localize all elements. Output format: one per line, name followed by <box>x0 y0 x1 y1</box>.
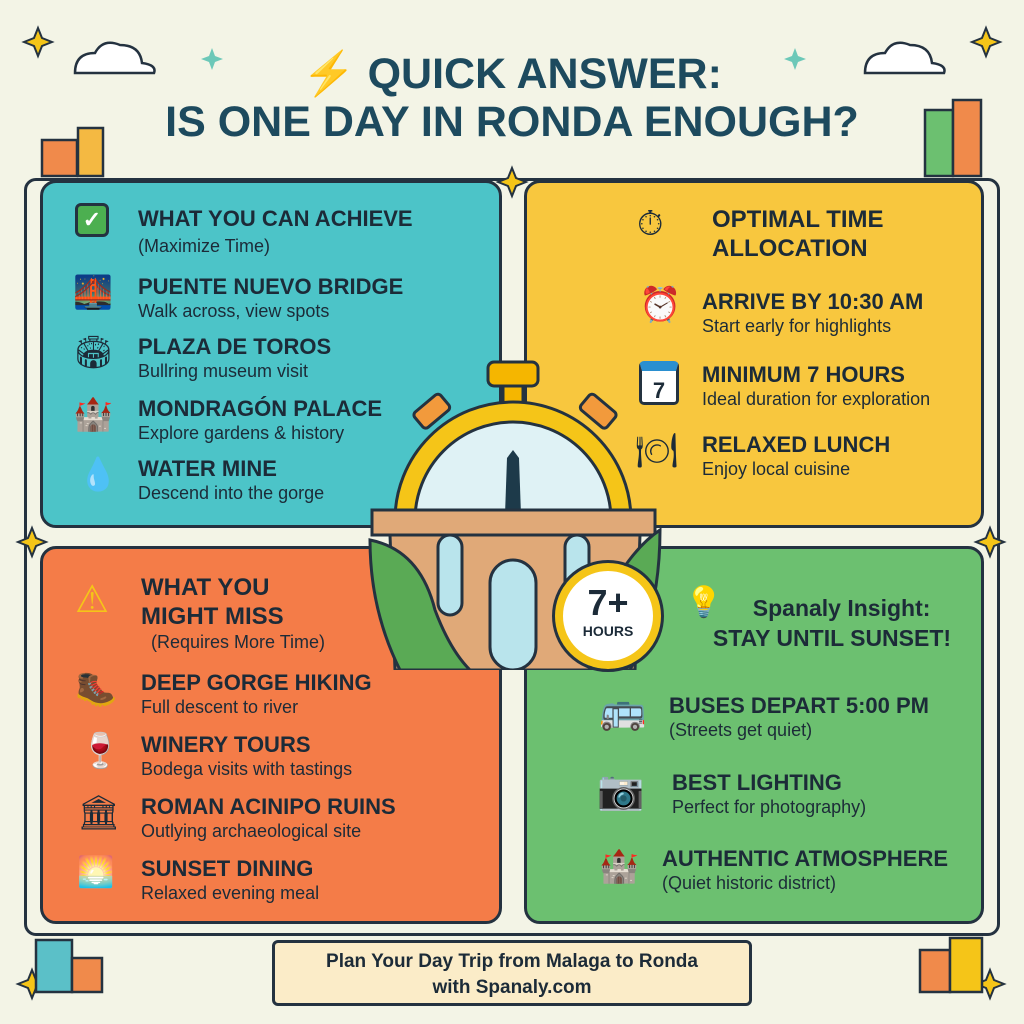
item: palace: 🏰 <box>73 396 113 432</box>
title: ⚡ QUICK ANSWER: <box>302 50 722 98</box>
panel: what you might miss: Bodega visits with tastings <box>141 759 352 779</box>
panel: what you might miss: Relaxed evening meal <box>141 883 319 903</box>
panel: optimal time allocation: MINIMUM 7 HOURS <box>702 362 905 387</box>
item: arrive: ⏰ <box>639 286 681 324</box>
heading: ⚠ <box>75 579 109 621</box>
panel: optimal time allocation <box>524 180 984 528</box>
panel: what you can achieve: Walk across, view spots <box>138 301 329 321</box>
item: water mine: 💧 <box>78 456 118 492</box>
panel: what you can achieve: MONDRAGÓN PALACE <box>138 396 382 421</box>
panel: what you can achieve: Descend into the gorge <box>138 483 324 503</box>
panel: what you can achieve: WATER MINE <box>138 456 277 481</box>
item: puente nuevo: 🌉 <box>73 274 113 310</box>
item: lighting: 📷 <box>597 770 644 812</box>
panel: optimal time allocation: OPTIMAL TIME <box>712 206 884 233</box>
panel: spanaly insight: (Quiet historic district) <box>662 873 836 893</box>
title <box>165 49 859 146</box>
item: minimum 7 hours: 7 <box>653 378 665 403</box>
title: IS ONE DAY IN RONDA ENOUGH? <box>165 98 859 146</box>
item: hiking: 🥾 <box>75 670 117 708</box>
panel: optimal time allocation: Enjoy local cuisine <box>702 459 850 479</box>
heading: 💡 <box>685 586 722 619</box>
item: sunset dining: 🌅 <box>77 856 114 889</box>
item: atmosphere: 🏰 <box>599 848 639 884</box>
panel: spanaly insight: BUSES DEPART 5:00 PM <box>669 693 929 718</box>
outer frame <box>24 178 1000 936</box>
panel: spanaly insight: Spanaly Insight: <box>753 595 930 621</box>
panel: optimal time allocation: ARRIVE BY 10:30 AM <box>702 289 923 314</box>
item: ruins: 🏛 <box>77 794 120 832</box>
panel: what you might miss: SUNSET DINING <box>141 856 313 881</box>
panel: what you can achieve: WHAT YOU CAN ACHIEVE <box>138 206 413 231</box>
panel: what you can achieve: PUENTE NUEVO BRIDGE <box>138 274 403 299</box>
panel: spanaly insight: STAY UNTIL SUNSET! <box>713 625 951 651</box>
panel: what you might miss: Outlying archaeological site <box>141 821 361 841</box>
panel: spanaly insight: BEST LIGHTING <box>672 770 842 795</box>
panel: what you can achieve: (Maximize Time) <box>138 236 270 256</box>
panel: what you might miss: WHAT YOU <box>141 574 269 601</box>
panel: what you might miss: (Requires More Time) <box>151 632 325 652</box>
panel: what you can achieve: PLAZA DE TOROS <box>138 334 331 359</box>
panel: what you can achieve: Explore gardens & history <box>138 423 344 443</box>
footer banner <box>272 940 752 1006</box>
footer banner: Plan Your Day Trip from Malaga to Ronda <box>326 951 698 972</box>
panel: spanaly insight: (Streets get quiet) <box>669 720 812 740</box>
panel: what you might miss: MIGHT MISS <box>141 603 284 630</box>
panel: what you can achieve <box>40 180 502 528</box>
panel: what you can achieve: Bullring museum visit <box>138 361 308 381</box>
item: winery: 🍷 <box>79 732 121 770</box>
panel: spanaly insight: Perfect for photography) <box>672 797 866 817</box>
item: lunch: 🍽 <box>635 432 678 470</box>
heading: ⏱ <box>637 205 664 243</box>
panel: optimal time allocation: RELAXED LUNCH <box>702 432 890 457</box>
item: buses: 🚌 <box>599 690 646 732</box>
panel: optimal time allocation: ALLOCATION <box>712 235 868 262</box>
item: plaza de toros: 🏟 <box>73 334 114 370</box>
stopwatch with bridge <box>368 360 662 670</box>
panel: what you might miss: DEEP GORGE HIKING <box>141 670 372 695</box>
panel: what you might miss: ROMAN ACINIPO RUINS <box>141 794 396 819</box>
panel: optimal time allocation: Ideal duration for exploration <box>702 389 930 409</box>
badge: 7+ hours: 7+ <box>587 582 629 623</box>
item: minimum 7 hours <box>639 361 679 405</box>
heading: ✓ <box>83 207 101 232</box>
panel: what you might miss <box>40 546 502 924</box>
panel: what you might miss: Full descent to river <box>141 697 298 717</box>
panel: spanaly insight: AUTHENTIC ATMOSPHERE <box>662 846 948 871</box>
footer banner: with Spanaly.com <box>432 977 592 998</box>
panel: what you might miss: WINERY TOURS <box>141 732 311 757</box>
badge: 7+ hours <box>555 563 661 669</box>
panel: optimal time allocation: Start early for highlights <box>702 316 891 336</box>
badge: 7+ hours: HOURS <box>583 623 633 639</box>
panel: spanaly insight <box>524 546 984 924</box>
